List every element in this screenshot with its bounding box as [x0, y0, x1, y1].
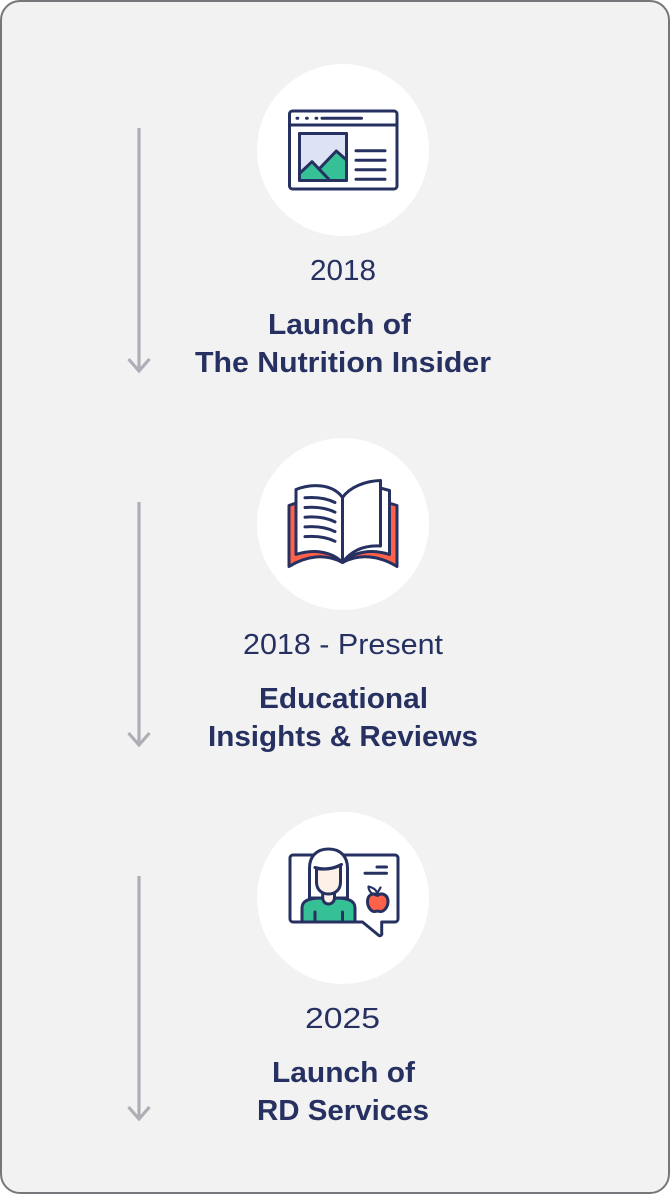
year: 2018 - Present: 2018 - Present: [243, 629, 443, 661]
icon circle: step 3: [257, 812, 429, 984]
arrow: step 3: [128, 876, 150, 1119]
heading: Launch of The Nutrition Insider: [195, 309, 491, 379]
icon circle: step 2: [257, 438, 429, 610]
heading: Launch of The Nutrition Insider: Launch of: [268, 309, 411, 341]
year: 2018: 2018: [310, 255, 376, 287]
heading: Educational Insights &amp; Reviews: Insights & Reviews: [208, 721, 478, 753]
heading: Launch of RD Services: RD Services: [257, 1095, 429, 1127]
icon: dietitian speech card: [290, 849, 398, 936]
year: 2025: 2025: [305, 1003, 380, 1035]
arrow: step 2: [128, 502, 150, 745]
icon: open book: [289, 480, 397, 566]
icon: web page: [290, 111, 397, 189]
heading: Launch of The Nutrition Insider: The Nutrition Insider: [195, 347, 491, 379]
heading: Educational Insights &amp; Reviews: [208, 683, 478, 753]
heading: Educational Insights &amp; Reviews: Educational: [259, 683, 428, 715]
heading: Launch of RD Services: [257, 1057, 429, 1127]
arrow: step 1: [128, 128, 150, 371]
heading: Launch of RD Services: Launch of: [272, 1057, 415, 1089]
icon circle: step 1: [257, 64, 429, 236]
